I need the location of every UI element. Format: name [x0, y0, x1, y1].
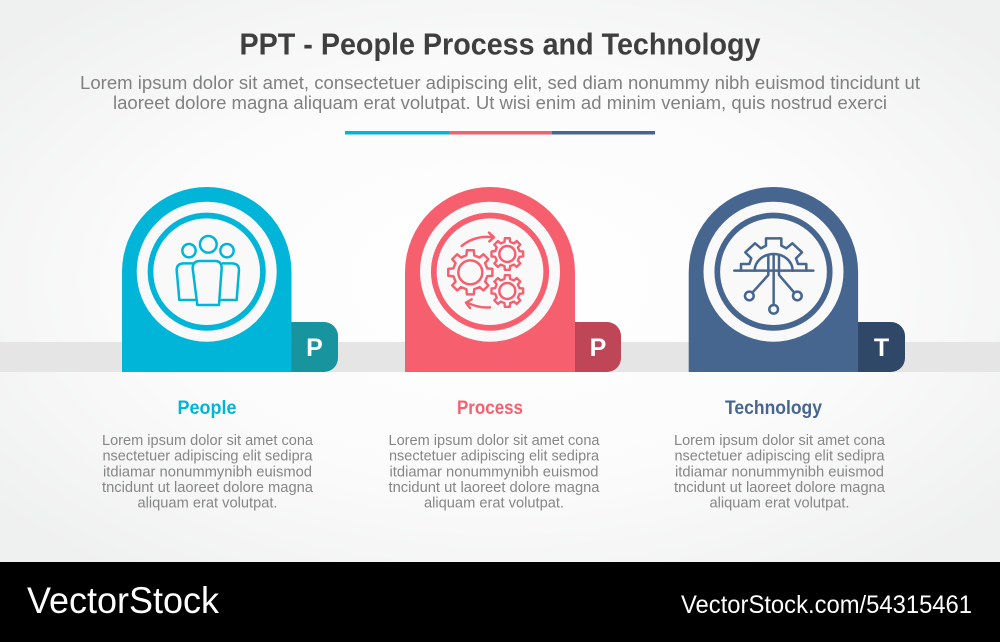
process tab shape [405, 187, 575, 372]
heading: process: Process [457, 398, 523, 419]
text block: technology: aliquam erat volutpat. [710, 496, 850, 512]
text block: process: aliquam erat volutpat. [424, 496, 564, 512]
text block: people: nsectetuer adipiscing elit sedipra [102, 449, 313, 465]
technology tab shape [689, 187, 858, 372]
icon: circuit gear [734, 238, 813, 314]
text block: people: itdiamar nonummynibh euismod [103, 464, 312, 480]
footer url: VectorStock.com/54315461 [681, 591, 972, 619]
text block: technology: itdiamar nonummynibh euismod [675, 464, 884, 480]
people circle [137, 202, 277, 342]
text block: technology [674, 433, 886, 512]
badge: T: T [874, 334, 889, 362]
panel: process [405, 187, 621, 372]
badge: P [575, 322, 621, 372]
badge: T [858, 322, 905, 372]
badge: P: P [590, 334, 606, 362]
people tab shape [122, 187, 292, 372]
text block: people [102, 433, 314, 512]
panel: technology [689, 187, 905, 372]
text block: process [388, 433, 600, 512]
badge: P [291, 322, 338, 372]
text block: technology: tncidunt ut laoreet dolore magna [674, 480, 886, 496]
subtitle text block [80, 72, 920, 113]
icon: people group [177, 236, 239, 305]
text block: people: Lorem ipsum dolor sit amet cona [102, 433, 314, 449]
text block: people: tncidunt ut laoreet dolore magna [102, 480, 314, 496]
text block: technology: nsectetuer adipiscing elit sedipra [674, 449, 885, 465]
text block: people: aliquam erat volutpat. [138, 496, 278, 512]
subtitle text block: Lorem ipsum dolor sit amet, consectetuer adipiscing elit, sed diam nonummy nibh euismod tincidunt ut [80, 72, 920, 93]
technology circle [704, 202, 844, 342]
heading: people: People [178, 398, 236, 419]
process circle [420, 202, 560, 342]
text block: technology: Lorem ipsum dolor sit amet cona [674, 433, 886, 449]
tri-colour divider [345, 131, 655, 134]
heading: technology: Technology [725, 398, 822, 419]
text block: process: Lorem ipsum dolor sit amet cona [388, 433, 600, 449]
icon: gears with arrows [448, 233, 523, 308]
footer logo text: VectorStock [27, 580, 219, 621]
title: PPT - People Process and Technology [240, 26, 761, 62]
badge: P: P [306, 334, 323, 362]
text block: process: tncidunt ut laoreet dolore magna [388, 480, 600, 496]
text block: process: nsectetuer adipiscing elit sedipra [389, 449, 600, 465]
panel: people [122, 187, 338, 372]
subtitle text block: laoreet dolore magna aliquam erat volutpat. Ut wisi enim ad minim veniam, quis nostrud exerci [113, 92, 887, 113]
text block: process: itdiamar nonummynibh euismod [390, 464, 598, 480]
footer bar [0, 562, 1000, 642]
